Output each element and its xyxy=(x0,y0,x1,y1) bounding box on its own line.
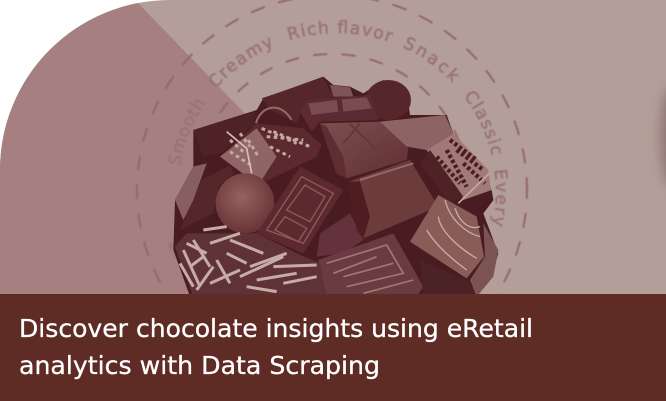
top dark bar xyxy=(262,77,333,123)
ring words: Every xyxy=(490,170,508,227)
caption title: Discover chocolate insights using eRetail xyxy=(19,314,533,343)
panel: diagonal pink area xyxy=(0,3,245,294)
outer dashed ring xyxy=(136,0,528,294)
lower dark piece xyxy=(317,213,363,257)
right centre bar xyxy=(348,160,438,238)
bottom left shards xyxy=(175,233,327,297)
right bottom dark xyxy=(422,285,424,288)
wrapper foil top xyxy=(330,85,353,97)
blurred right edge shadow xyxy=(661,87,666,187)
inner dashed ring xyxy=(219,52,460,140)
left dark wedge xyxy=(180,165,233,230)
left flat dark piece xyxy=(193,126,204,130)
right foil wrapper xyxy=(380,115,453,150)
small top bar xyxy=(300,95,378,132)
panel: hero background xyxy=(0,0,666,294)
round truffle xyxy=(366,80,411,120)
ring words: Smooth xyxy=(168,100,204,165)
nutty bar top left xyxy=(220,123,322,185)
caption title xyxy=(19,314,533,380)
caption title: analytics with Data Scraping xyxy=(19,351,380,380)
bottom centre bar xyxy=(318,233,423,297)
ring words: Rich flavor xyxy=(287,20,394,42)
square patterned bar xyxy=(257,167,343,253)
striped bar xyxy=(410,195,484,278)
chocolate ball xyxy=(216,173,274,233)
ring words: * xyxy=(167,239,175,258)
centre big piece xyxy=(320,122,408,178)
pile silhouette xyxy=(173,77,498,297)
speckled right bar xyxy=(427,133,492,200)
ring words: Snack xyxy=(403,36,460,83)
ring words: Creamy xyxy=(210,37,271,86)
wire loop xyxy=(256,108,292,123)
caption band xyxy=(0,294,666,401)
ring words: Classic xyxy=(466,91,502,156)
ring words xyxy=(168,20,508,250)
chocolate pile xyxy=(173,77,498,297)
